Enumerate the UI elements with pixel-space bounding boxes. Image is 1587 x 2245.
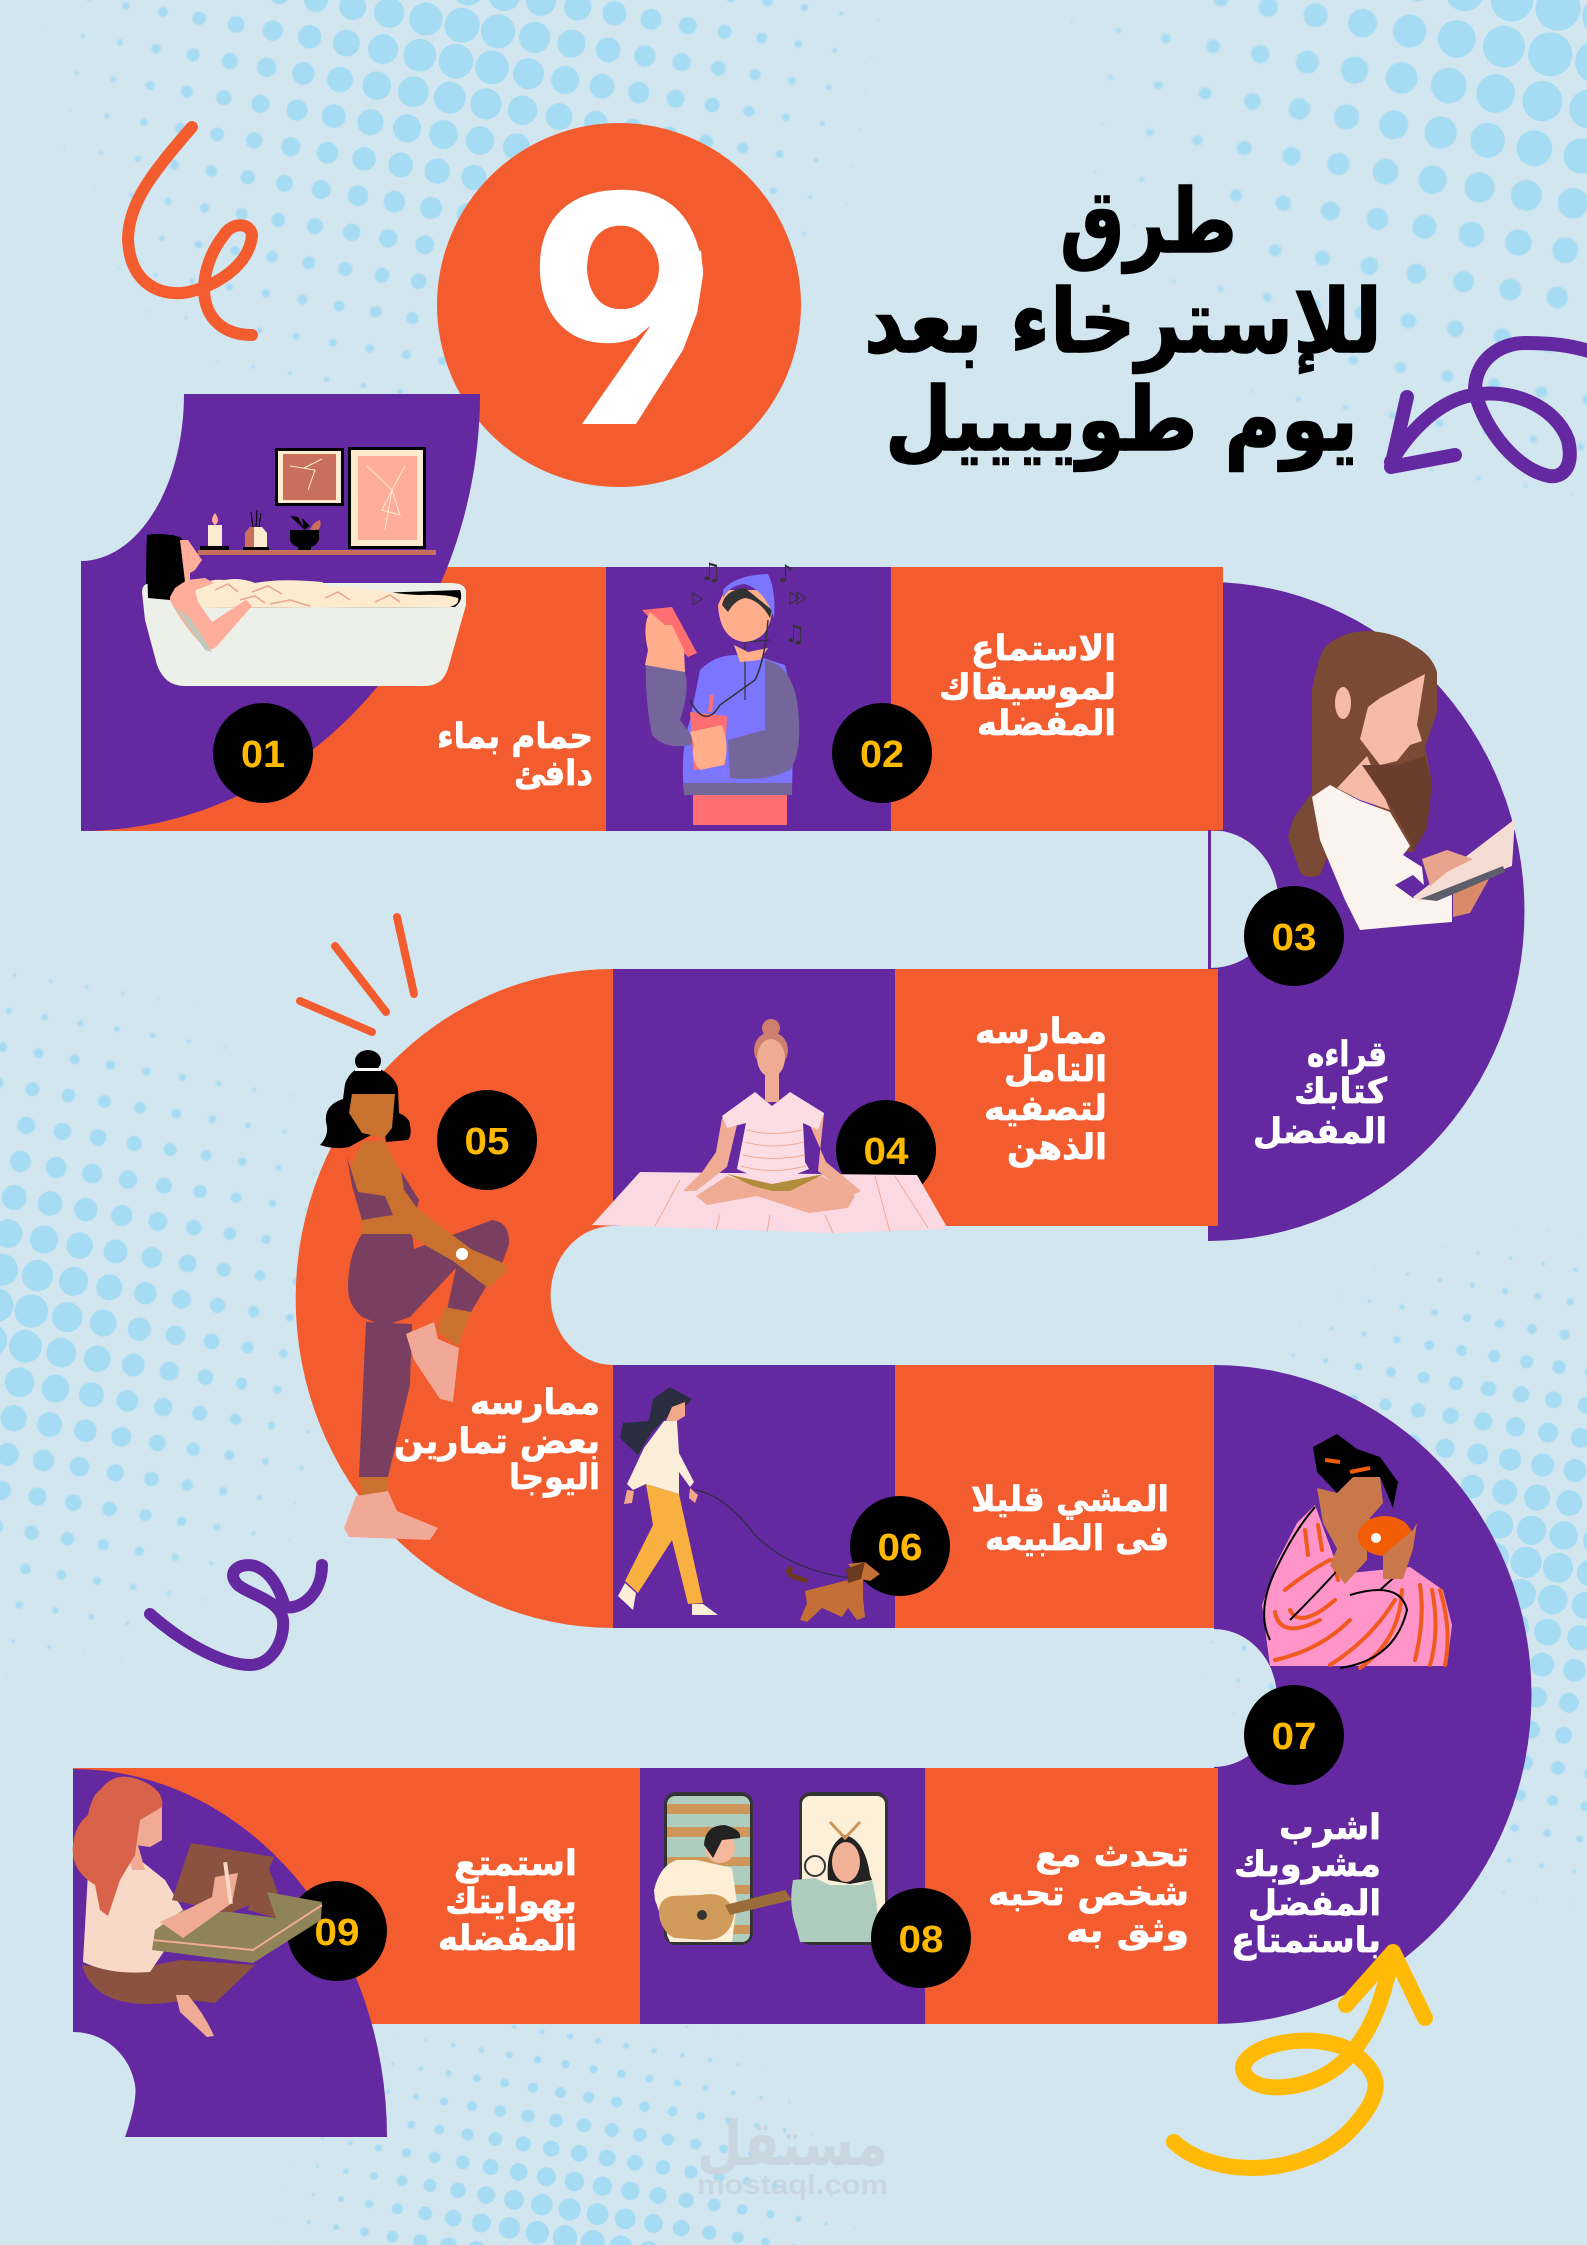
illustration: woman in yoga pose xyxy=(320,1050,509,1540)
number badge 08 xyxy=(871,1888,971,1988)
purple scribble bottom-left xyxy=(150,1565,322,1665)
row 4 band xyxy=(73,1768,1218,2024)
title: يوم طوييييل xyxy=(885,368,1358,472)
label: read your favourite book xyxy=(1253,1035,1388,1152)
title: للإسترخاء بعد xyxy=(864,270,1382,374)
watermark xyxy=(697,2107,888,2200)
label: drink your favourite beverage with pleasure: المفضل xyxy=(1248,1884,1381,1924)
row 2 band xyxy=(613,969,1218,1226)
label: drink your favourite beverage with pleasure xyxy=(1231,1808,1381,1961)
step 03: read your favourite book xyxy=(1244,631,1515,1152)
watermark: mostaql.com xyxy=(697,2169,888,2200)
label: talk to someone you love and trust: تحدث مع xyxy=(1035,1835,1189,1875)
illustration: boy with headphones and phone: ♫ xyxy=(784,620,806,648)
label: listen to your favourite music xyxy=(939,629,1116,744)
row 4 purple cell xyxy=(640,1768,925,2024)
title: طرق xyxy=(1060,170,1237,273)
step 04: meditation xyxy=(592,1012,1107,1233)
label: warm bath: دافئ xyxy=(514,754,593,794)
illustration: woman meditating on mat xyxy=(592,1019,948,1233)
number badge 03: 03 xyxy=(1272,917,1316,959)
label: walk a little in nature: المشي قليلا xyxy=(971,1480,1169,1520)
label: talk to someone you love and trust: وثق به xyxy=(1066,1911,1189,1951)
row 2 purple cell xyxy=(613,969,895,1226)
label: warm bath xyxy=(437,717,593,794)
row 1 band end over the bend xyxy=(1190,567,1223,830)
big orange circle with number 9 xyxy=(437,121,801,494)
label: meditate to clear the mind: ممارسه xyxy=(975,1012,1107,1052)
curve: left orange bend 05 xyxy=(296,969,613,1628)
curve: right purple bend 03 xyxy=(1208,582,1524,1241)
illustration: woman painting at a table xyxy=(73,1777,322,2037)
purple arrow scribble pointing at title xyxy=(1391,343,1587,476)
number badge 02: 02 xyxy=(860,734,904,776)
label: meditate to clear the mind: لتصفيه xyxy=(984,1089,1107,1129)
label: drink your favourite beverage with pleasure: باستمتاع xyxy=(1231,1921,1381,1961)
label: listen to your favourite music: الاستماع xyxy=(971,629,1116,669)
label: meditate to clear the mind: التامل xyxy=(1004,1050,1107,1090)
illustration: woman in bathtub with shelf xyxy=(142,447,466,686)
step 06: walk in nature xyxy=(618,1387,1169,1622)
label: listen to your favourite music: المفضله xyxy=(977,704,1116,744)
illustration: girl reading a book xyxy=(1288,631,1515,930)
label: read your favourite book: المفضل xyxy=(1253,1112,1387,1152)
step 02: listen to music xyxy=(642,558,1116,825)
label: walk a little in nature: فى الطبيعه xyxy=(985,1519,1169,1559)
number badge 01: 01 xyxy=(241,734,285,776)
illustration: video call phones xyxy=(654,1792,888,1945)
row 1 band xyxy=(81,567,1223,831)
decorative scribble: orange top-left xyxy=(128,127,252,335)
step 01: warm bath xyxy=(142,447,593,803)
label: drink your favourite beverage with pleasure: اشرب xyxy=(1279,1808,1381,1848)
number badge 05: 05 xyxy=(464,1121,510,1163)
number badge 04 xyxy=(836,1100,936,1200)
number badge 03 xyxy=(1244,886,1344,986)
number badge 08: 08 xyxy=(898,1919,944,1961)
row 1 purple cell xyxy=(606,567,891,831)
label: do some yoga exercises: اليوجا xyxy=(509,1458,600,1498)
label: do some yoga exercises xyxy=(394,1383,600,1498)
label: warm bath: حمام بماء xyxy=(437,717,593,757)
title xyxy=(864,170,1382,472)
curve: right purple bend 07 xyxy=(1214,1365,1531,2024)
curve: top left purple corner xyxy=(81,394,480,831)
number badge 02 xyxy=(832,703,932,803)
yellow arrow scribble xyxy=(1174,1952,1425,2168)
label: drink your favourite beverage with pleasure: مشروبك xyxy=(1234,1845,1381,1885)
row 3 purple cell xyxy=(613,1365,895,1628)
label: listen to your favourite music: لموسيقاك xyxy=(939,668,1116,708)
burst lines above yoga woman xyxy=(300,917,414,1032)
label: read your favourite book: قراءه xyxy=(1307,1035,1387,1075)
label: enjoy your favourite hobbies xyxy=(438,1844,577,1959)
winding path panels xyxy=(73,394,1531,2137)
illustration: boy with headphones and phone: ♫ xyxy=(700,558,722,586)
number badge 06: 06 xyxy=(878,1527,922,1569)
watermark: مستقل xyxy=(697,2107,888,2180)
label: meditate to clear the mind xyxy=(975,1012,1107,1168)
step 09: enjoy your hobbies xyxy=(73,1777,577,2037)
label: enjoy your favourite hobbies: استمتع xyxy=(454,1844,577,1884)
label: do some yoga exercises: ممارسه xyxy=(470,1383,600,1423)
label: enjoy your favourite hobbies: المفضله xyxy=(438,1919,577,1959)
label: do some yoga exercises: بعض تمارين xyxy=(394,1422,600,1462)
label: meditate to clear the mind: الذهن xyxy=(1007,1128,1107,1168)
number badge 09 xyxy=(287,1881,387,1981)
row 3 orange cell xyxy=(895,1365,1215,1628)
label: enjoy your favourite hobbies: بهوايتك xyxy=(445,1882,577,1922)
step 05: yoga xyxy=(300,917,600,1540)
illustration: boy with headphones and phone: ♪ xyxy=(778,560,793,588)
label: walk a little in nature xyxy=(971,1480,1169,1559)
number badge 05 xyxy=(437,1090,537,1190)
step 08: talk to someone you trust xyxy=(654,1792,1189,1988)
step 07: drink your favourite beverage xyxy=(1231,1434,1452,1961)
number badge 09: 09 xyxy=(314,1912,360,1954)
illustration: woman in pink pyjamas drinking xyxy=(1262,1434,1452,1668)
illustration: boy with headphones and phone xyxy=(642,558,806,825)
big orange circle with number 9: 9 xyxy=(528,121,718,494)
number badge 04: 04 xyxy=(864,1131,908,1173)
label: talk to someone you love and trust xyxy=(988,1835,1189,1951)
label: talk to someone you love and trust: شخص تحبه xyxy=(988,1874,1189,1914)
number badge 01 xyxy=(213,703,313,803)
illustration: woman walking dog xyxy=(618,1387,880,1622)
number badge 07 xyxy=(1244,1685,1344,1785)
number badge 07: 07 xyxy=(1272,1716,1316,1758)
label: read your favourite book: كتابك xyxy=(1294,1072,1388,1112)
number badge 06 xyxy=(850,1496,950,1596)
curve: bottom left purple corner xyxy=(73,1769,387,2137)
